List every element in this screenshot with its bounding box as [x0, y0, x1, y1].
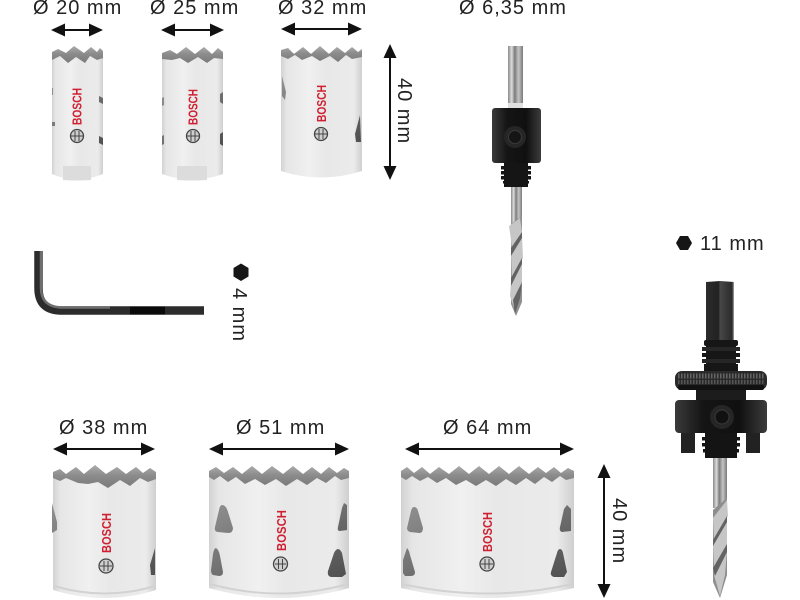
icon: hexagon 11 mm: [676, 236, 692, 250]
label: height 40 mm top row: 40 mm: [393, 78, 415, 144]
hole saw 32 mm: [281, 46, 362, 178]
icon: hexagon 4 mm: [234, 264, 248, 281]
label: diameter 38 mm: Ø 38 mm: [59, 417, 148, 439]
hex key: [38, 251, 204, 310]
drill bit: [509, 187, 523, 316]
small arbor with pilot drill: [492, 46, 541, 316]
teeth: [162, 47, 223, 63]
side slots: [52, 88, 103, 145]
teeth: [281, 46, 362, 62]
hole saw 51 mm: [209, 466, 349, 598]
collar: [492, 108, 541, 163]
teeth: [401, 466, 574, 486]
hole saw 38 mm: [52, 465, 156, 598]
hole saw 20 mm: [52, 46, 103, 180]
brand: BOSCH: [70, 88, 84, 125]
knurled nut: [675, 371, 767, 390]
logo mark: [314, 128, 328, 140]
logo mark: [274, 557, 288, 571]
logo mark: [99, 559, 113, 573]
side slots: [162, 92, 223, 146]
brand: BOSCH: [480, 512, 495, 552]
label: height 40 mm bottom row: 40 mm: [608, 498, 630, 564]
lock collar: [675, 400, 767, 433]
side slots: [211, 503, 347, 577]
shank: [508, 46, 523, 108]
brand: BOSCH: [314, 85, 329, 122]
hole saw 25 mm: [162, 47, 223, 180]
lower thread: [702, 433, 740, 458]
label: diameter 51 mm: Ø 51 mm: [236, 417, 325, 439]
arrow: width of 25 mm saw: [161, 24, 224, 36]
logo mark: [186, 130, 200, 142]
drill bit: [713, 458, 728, 598]
label: hex key size: 4 mm: [228, 288, 250, 342]
logo mark: [480, 557, 494, 571]
arrow: width of 38 mm saw: [53, 442, 155, 456]
logo mark: [70, 130, 84, 142]
arrow: width of 51 mm saw: [209, 442, 349, 456]
arrow: width of 64 mm saw: [405, 442, 574, 456]
right pin: [746, 433, 760, 453]
set screw: [504, 126, 526, 148]
hex shank: [706, 281, 734, 342]
set screw: [710, 405, 734, 429]
left pin: [681, 433, 695, 453]
arrow: width of 20 mm saw: [51, 24, 103, 36]
neck: [696, 390, 746, 401]
teeth: [53, 465, 156, 488]
hole saw 64 mm: [401, 466, 574, 598]
arrow: height 40 mm bottom row: [598, 464, 610, 598]
arrow: width of 32 mm saw: [281, 22, 362, 36]
arrow: height 40 mm top row: [384, 44, 396, 180]
teeth: [209, 466, 349, 486]
thread: [501, 163, 531, 187]
teeth: [52, 46, 103, 63]
label: hex shank size: 11 mm: [700, 233, 765, 255]
bottom window: [63, 166, 91, 180]
brand: BOSCH: [99, 513, 114, 553]
large arbor with pilot drill: [675, 281, 767, 598]
bottom window: [177, 166, 207, 180]
side slots: [282, 76, 361, 142]
side slots: [403, 505, 571, 577]
brand: BOSCH: [186, 89, 200, 125]
side slots: [52, 503, 155, 575]
label: diameter 64 mm: Ø 64 mm: [443, 417, 532, 439]
brand: BOSCH: [274, 510, 289, 551]
upper thread: [702, 340, 740, 371]
